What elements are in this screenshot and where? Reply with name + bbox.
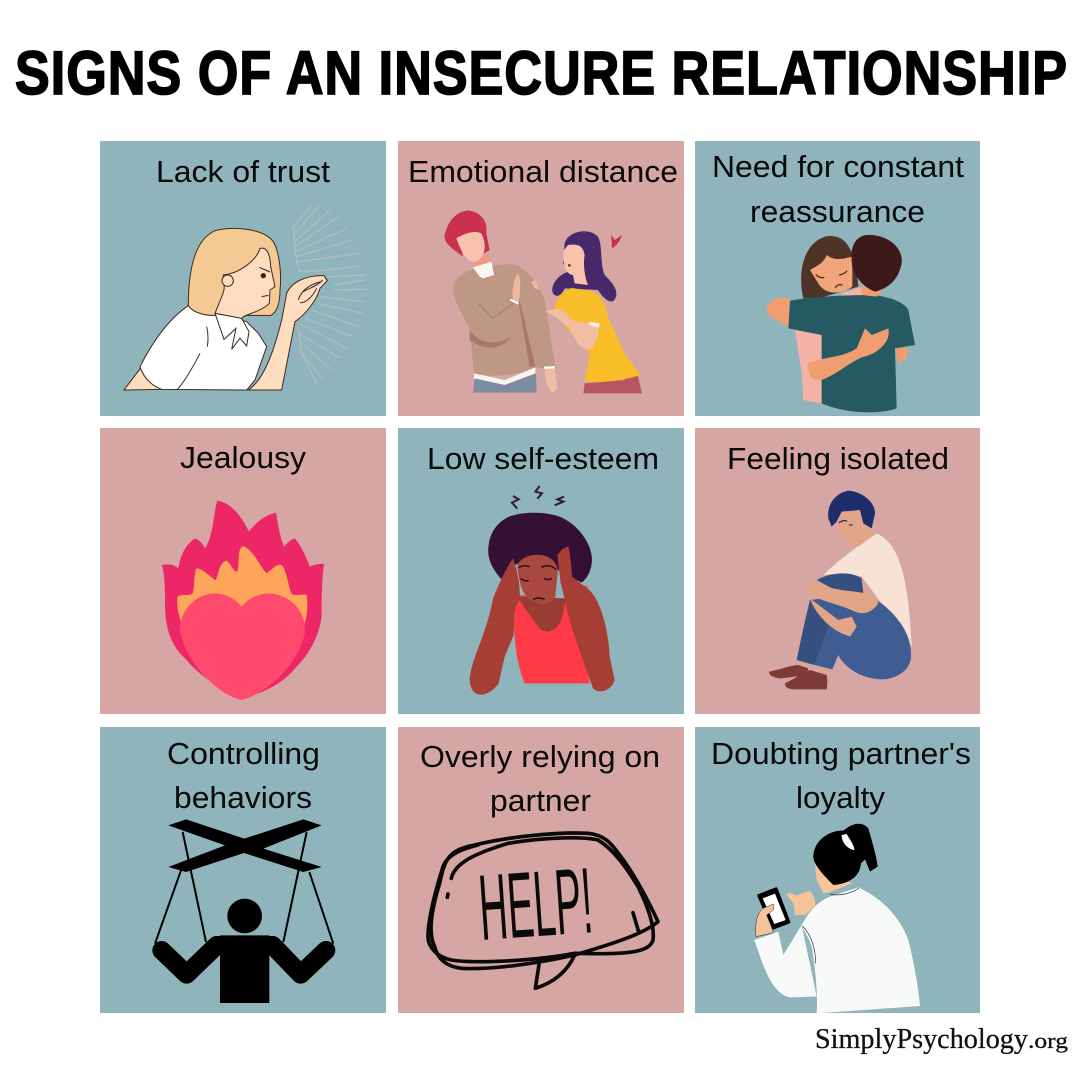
source credit: SimplyPsychology <box>815 1023 1028 1055</box>
label: feeling isolated: Feeling isolated <box>727 441 949 476</box>
label: need for constant reassurance: reassurance <box>750 194 925 229</box>
label: lack of trust: Lack of trust <box>156 154 330 189</box>
panel: lack of trust <box>100 141 386 416</box>
panel: jealousy <box>100 428 386 714</box>
title: SIGNS OF AN INSECURE RELATIONSHIP <box>15 39 1067 107</box>
panel: feeling isolated <box>695 428 980 714</box>
label: overly relying on partner: partner <box>490 783 591 818</box>
illustration: woman checking phone <box>754 824 920 1013</box>
label: emotional distance: Emotional distance <box>408 154 678 189</box>
label: need for constant reassurance: Need for constant <box>712 149 964 184</box>
panel: need for constant reassurance <box>695 141 980 416</box>
panel: emotional distance <box>398 141 684 416</box>
icon: help speech bubble <box>428 833 658 988</box>
label: need for constant reassurance <box>712 149 964 229</box>
icon: flaming heart <box>162 501 324 700</box>
illustration: couple hugging <box>767 235 915 412</box>
panel: controlling behaviors <box>100 727 386 1013</box>
icon: help speech bubble: HELP! <box>475 848 596 960</box>
label: low self-esteem: Low self-esteem <box>427 441 659 476</box>
illustration: man pushing woman away <box>445 211 642 393</box>
label: doubting partner's loyalty <box>711 736 971 815</box>
illustration: sad man hugging knees <box>769 491 912 689</box>
illustration: woman peeking through fingers <box>124 205 367 390</box>
panel: low self-esteem <box>398 428 684 714</box>
label: overly relying on partner <box>420 739 660 818</box>
label: overly relying on partner: Overly relying on <box>420 739 660 774</box>
source credit: .org <box>1028 1028 1068 1053</box>
label: jealousy: Jealousy <box>180 440 307 475</box>
panel: overly relying on partner <box>398 727 684 1013</box>
label: controlling behaviors <box>167 736 320 815</box>
illustration: stressed woman holding head <box>470 486 615 695</box>
label: controlling behaviors: behaviors <box>174 780 312 815</box>
panel: doubting partner's loyalty <box>695 727 980 1013</box>
icon: puppet on strings <box>155 819 333 1003</box>
label: doubting partner's loyalty: loyalty <box>796 780 886 815</box>
label: controlling behaviors: Controlling <box>167 736 320 771</box>
label: doubting partner's loyalty: Doubting partner's <box>711 736 971 771</box>
